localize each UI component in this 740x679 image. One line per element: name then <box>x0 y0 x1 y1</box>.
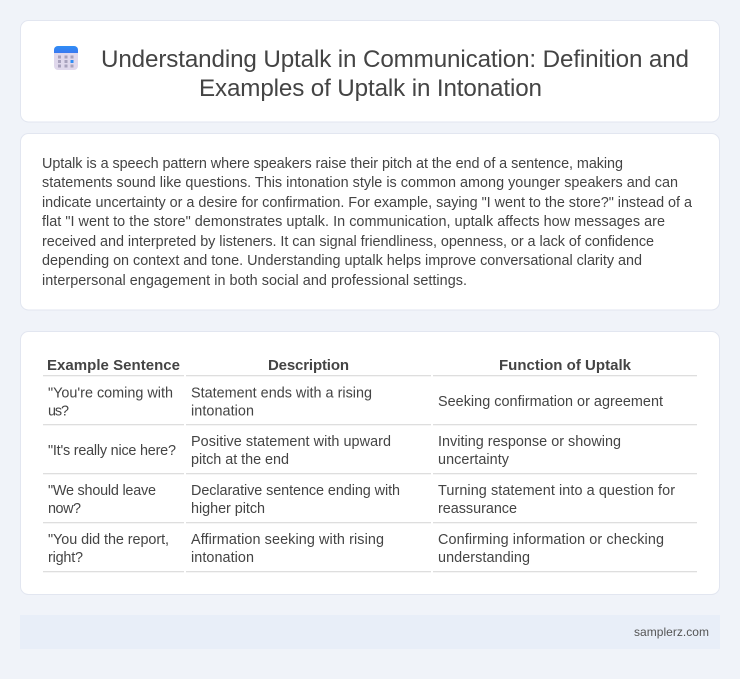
table row 4: understanding <box>438 550 530 566</box>
table row 4: intonation <box>191 550 254 566</box>
table row 3: Turning statement into a question for <box>438 483 675 499</box>
text block: uptalk explanation: depending on context and tone. Understanding uptalk helps improve conversational clarity and <box>42 253 642 269</box>
table header <box>47 357 632 374</box>
table row 1 <box>48 386 663 420</box>
table row 3: higher pitch <box>191 501 265 517</box>
panel: description <box>20 134 720 310</box>
text block: uptalk explanation: interpersonal engagement in both social and professional settings. <box>42 273 467 289</box>
table row 3: "We should leave <box>48 483 156 499</box>
text block: uptalk explanation: indicate uncertainty or a desire for confirmation. For example, saying "I went to the store?" instead of a <box>42 195 692 211</box>
table row 4 <box>48 532 664 566</box>
table row 1: Seeking confirmation or agreement <box>438 394 663 410</box>
title: Understanding Uptalk in Communication: Definition and <box>101 46 689 73</box>
table row 2: Inviting response or showing <box>438 434 621 450</box>
table row 2: pitch at the end <box>191 452 289 468</box>
table row 4: Affirmation seeking with rising <box>191 532 384 548</box>
table header: Description <box>268 357 349 374</box>
table row 2: "It's really nice here? <box>48 443 176 459</box>
table row 1: "You're coming with <box>48 386 173 402</box>
text block: uptalk explanation <box>42 156 692 289</box>
title <box>101 46 689 102</box>
table row 1: intonation <box>191 404 254 420</box>
table row 2: uncertainty <box>438 452 510 468</box>
text block: uptalk explanation: statements sound like questions. This intonation style is common among younger speakers and can <box>42 175 678 191</box>
table row 3: Declarative sentence ending with <box>191 483 400 499</box>
title: Examples of Uptalk in Intonation <box>199 75 542 102</box>
icon: calendar <box>54 46 78 70</box>
table row 2 <box>48 434 621 468</box>
table header: Example Sentence <box>47 357 180 374</box>
table row 4: "You did the report, <box>48 532 169 548</box>
table header: Function of Uptalk <box>499 357 632 374</box>
text block: uptalk explanation: Uptalk is a speech pattern where speakers raise their pitch at the end of a sentence, making <box>42 156 623 172</box>
table row 3: now? <box>48 501 81 517</box>
table row 3: reassurance <box>438 501 517 517</box>
table row 1: us? <box>48 404 69 420</box>
text block: uptalk explanation: received and interpreted by listeners. It can signal friendliness, openness, or a lack of confidence <box>42 234 654 250</box>
table row 4: right? <box>48 550 83 566</box>
table row 2: Positive statement with upward <box>191 434 391 450</box>
text block: uptalk explanation: flat "I went to the store" demonstrates uptalk. In communication, uptalk affects how messages are <box>42 214 665 230</box>
table row 1: Statement ends with a rising <box>191 386 372 402</box>
panel: header <box>20 20 720 122</box>
footer: samplerz.com <box>634 625 709 639</box>
table row 3 <box>48 483 675 517</box>
panel: examples table <box>20 332 720 594</box>
footer <box>20 615 720 649</box>
table row 4: Confirming information or checking <box>438 532 664 548</box>
